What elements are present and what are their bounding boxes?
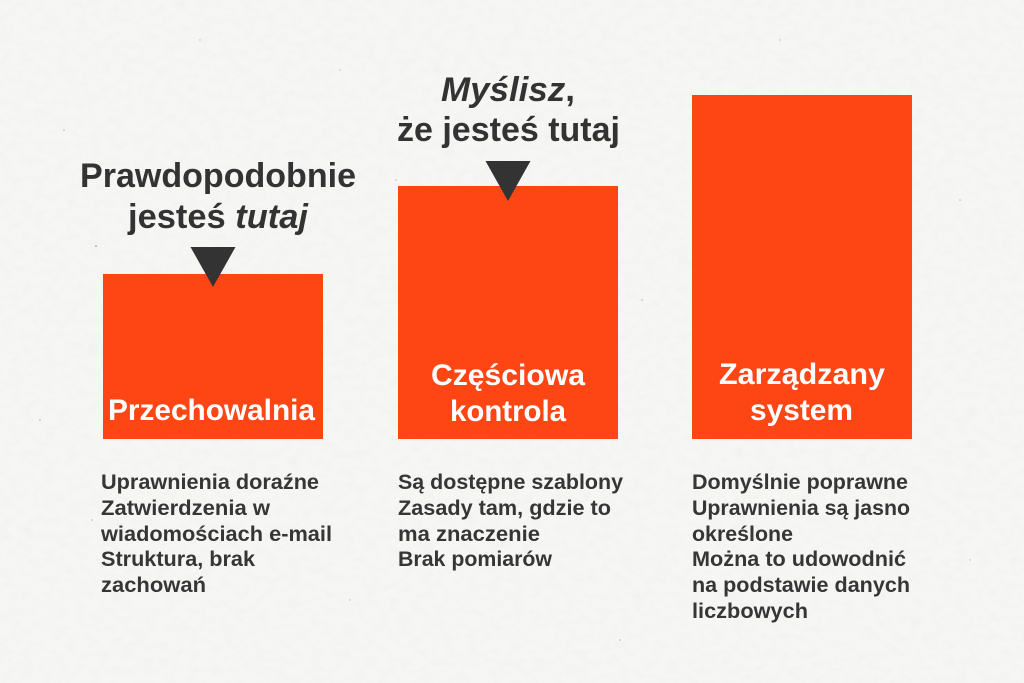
heading: myślisz, że jesteś tutaj: że jesteś tutaj	[397, 111, 620, 149]
heading: prawdopodobnie jesteś tutaj: jesteś tutaj	[127, 198, 309, 236]
bar label	[719, 358, 886, 427]
bar label	[431, 359, 586, 428]
panel: zarządzany system	[692, 95, 912, 623]
text block: description: Uprawnienia są jasno	[692, 497, 910, 520]
bar: zarządzany system	[692, 95, 912, 439]
text block: description	[100, 471, 332, 597]
icon: marker triangle	[190, 247, 236, 287]
panel: częściowa kontrola	[397, 71, 623, 571]
text block: description: Struktura, brak	[101, 548, 255, 571]
heading: prawdopodobnie jesteś tutaj	[80, 157, 356, 236]
heading: myślisz, że jesteś tutaj: Myślisz,	[441, 71, 575, 109]
text block: description: na podstawie danych	[692, 574, 910, 597]
text block: description: zachowań	[101, 574, 206, 597]
bar label: kontrola	[450, 395, 567, 428]
bar: przechowalnia	[103, 274, 323, 439]
bar label: system	[750, 394, 853, 427]
icon: marker triangle	[486, 161, 530, 201]
text block: description: Domyślnie poprawne	[692, 471, 908, 494]
text block: description: wiadomościach e-mail	[100, 523, 332, 546]
text block: description	[398, 471, 623, 571]
text block: description: Zatwierdzenia w	[101, 497, 271, 520]
text block: description: liczbowych	[692, 600, 808, 623]
text block: description: Zasady tam, gdzie to	[398, 497, 611, 520]
text block: description: Brak pomiarów	[398, 548, 553, 571]
heading: prawdopodobnie jesteś tutaj: Prawdopodobnie	[80, 157, 356, 195]
bar label: Częściowa	[431, 359, 586, 392]
bar: częściowa kontrola	[398, 186, 618, 439]
bar label: Zarządzany	[719, 358, 886, 391]
text block: description: określone	[692, 523, 793, 546]
bar label: Przechowalnia	[108, 394, 316, 427]
heading: myślisz, że jesteś tutaj	[397, 71, 620, 149]
text block: description	[692, 471, 910, 623]
panel: przechowalnia	[80, 157, 356, 597]
text block: description: ma znaczenie	[398, 523, 540, 546]
text block: description: Są dostępne szablony	[398, 471, 623, 494]
text block: description: Można to udowodnić	[692, 548, 906, 571]
text block: description: Uprawnienia doraźne	[101, 471, 319, 494]
